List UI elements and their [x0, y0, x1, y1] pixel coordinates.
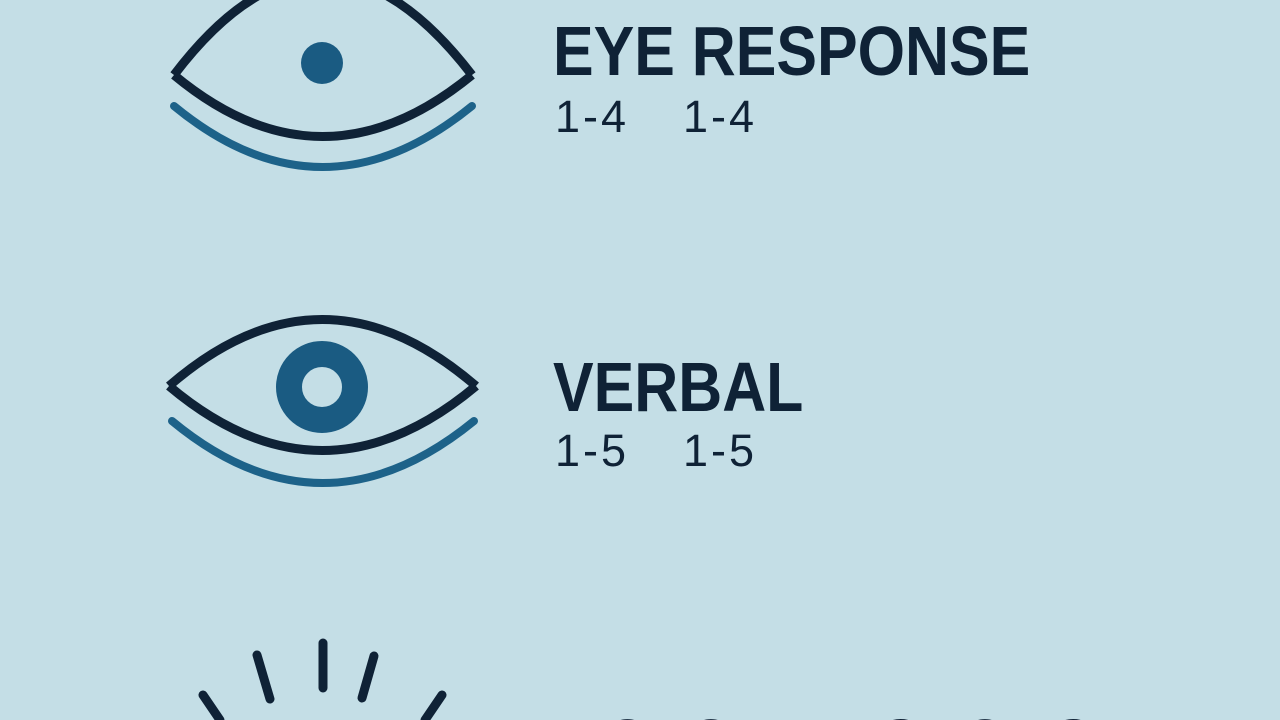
text: verbal range — [555, 425, 757, 476]
heading: verbal: VERBAL — [553, 348, 803, 426]
heading: eye response: EYE RESPONSE — [553, 12, 1030, 90]
text: verbal range: 1-5 — [683, 425, 757, 476]
text: eye range — [555, 91, 757, 142]
text: eye range: 1-4 — [683, 91, 757, 142]
text: verbal range: 1-5 — [555, 425, 629, 476]
text: eye range: 1-4 — [555, 91, 629, 142]
